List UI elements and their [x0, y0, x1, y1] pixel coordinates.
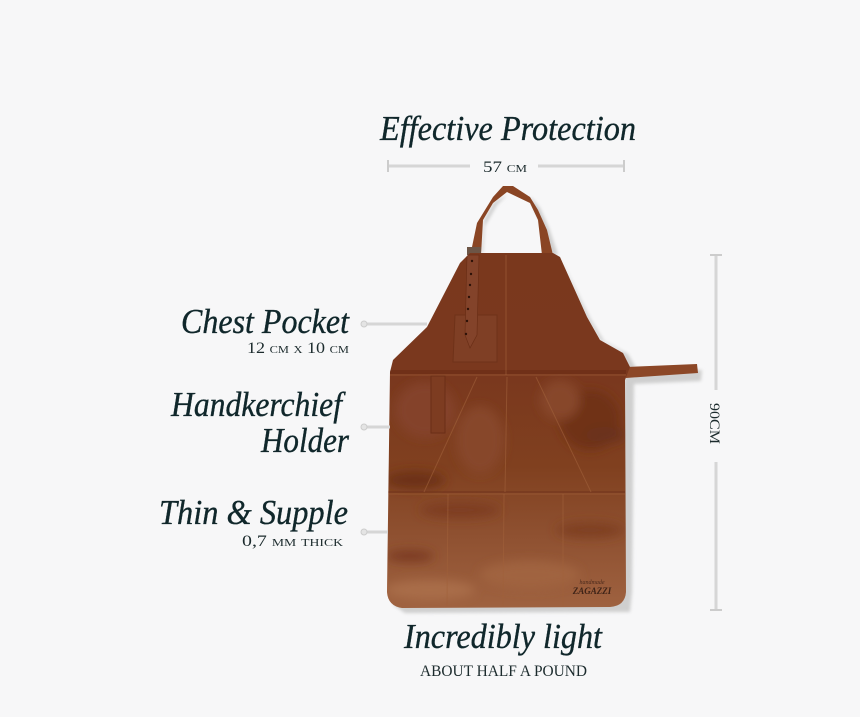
label: Handkerchief Holder: Handkerchief	[170, 385, 346, 424]
label: Handkerchief Holder: Holder	[260, 421, 349, 460]
label: Thin and Supple	[159, 493, 388, 550]
apron body	[387, 253, 630, 608]
leather texture	[385, 255, 626, 606]
apron illustration	[385, 186, 702, 613]
strap buckle	[467, 247, 481, 255]
width dimension: 57 cm: 57 cm	[483, 159, 527, 176]
apron logo	[572, 580, 612, 596]
label: Incredibly light	[403, 617, 603, 680]
apron logo: handmade	[580, 580, 605, 586]
heading: Effective Protection: Effective Protection	[379, 109, 636, 148]
label: Chest Pocket	[181, 302, 427, 357]
chest pocket and belt strap	[453, 255, 497, 362]
label: Incredibly light: Incredibly light	[403, 617, 603, 656]
height dimension: 90 cm	[706, 255, 722, 610]
width dimension: 57 cm	[388, 159, 624, 176]
apron shadow	[392, 195, 702, 613]
label: Handkerchief Holder	[170, 385, 390, 460]
height dimension: 90 cm: 90CM	[706, 403, 722, 444]
apron logo: ZAGAZZI	[572, 586, 612, 596]
handkerchief holder strap	[431, 376, 445, 433]
label: Incredibly light: ABOUT HALF A POUND	[420, 663, 587, 680]
label: Thin and Supple: Thin & Supple	[159, 493, 348, 532]
label: Chest Pocket: Chest Pocket	[181, 302, 350, 341]
apron seams	[388, 255, 626, 606]
apron neck strap	[472, 186, 553, 255]
label: Chest Pocket: 12 cm x 10 cm	[247, 340, 349, 357]
apron tie	[626, 364, 698, 378]
label: Thin and Supple: 0,7 mm thick	[242, 533, 343, 550]
